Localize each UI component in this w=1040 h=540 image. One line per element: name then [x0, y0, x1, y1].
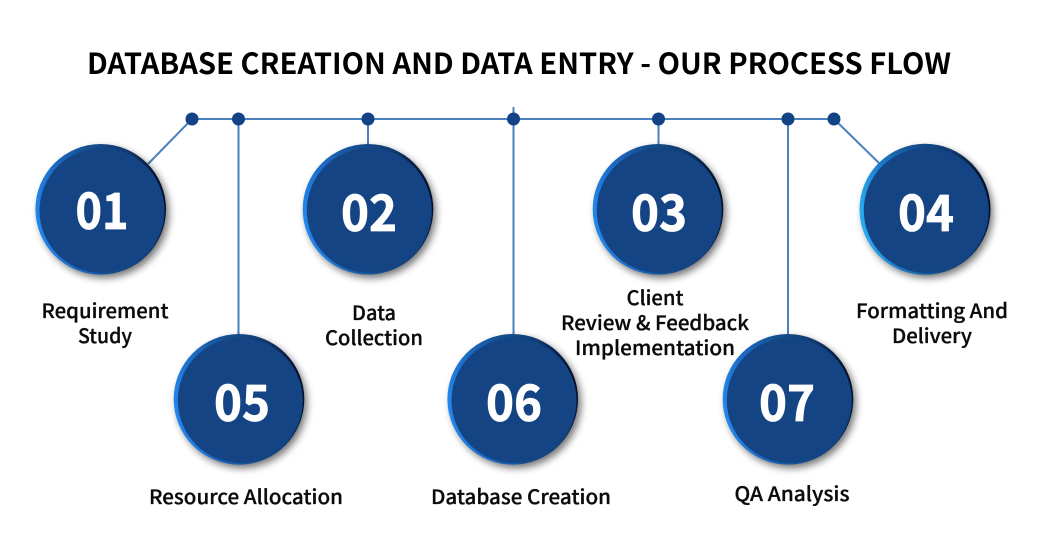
step 06 badge [447, 334, 581, 468]
step 05 badge [174, 334, 307, 468]
step 07 badge: 07 [759, 364, 815, 436]
label: client review and feedback implementation: Review & Feedback [561, 307, 750, 336]
label: database creation: Database Creation [431, 481, 611, 510]
label: client review and feedback implementation [561, 282, 750, 361]
label: resource allocation: Resource Allocation [149, 481, 343, 510]
label: formatting and delivery: Formatting And [856, 295, 1008, 324]
step 03 badge [593, 144, 726, 278]
label: qa analysis: QA Analysis [734, 478, 850, 507]
timeline nodes [186, 112, 840, 126]
step 05 badge: 05 [214, 364, 270, 436]
step 01 badge: 01 [76, 172, 128, 244]
label: requirement study: Study [78, 320, 132, 349]
step 02 badge: 02 [341, 174, 397, 246]
step 07 badge [723, 334, 856, 468]
title: DATABASE CREATION AND DATA ENTRY - OUR PROCESS FLOW [87, 41, 951, 83]
label: formatting and delivery [856, 295, 1008, 349]
label: data collection: Collection [325, 322, 423, 351]
step 04 badge: 04 [898, 174, 954, 246]
step 02 badge [303, 144, 436, 278]
step 01 badge [35, 144, 169, 278]
label: requirement study [42, 295, 169, 349]
label: data collection [325, 297, 423, 351]
label: formatting and delivery: Delivery [892, 320, 972, 349]
label: client review and feedback implementation: Implementation [575, 332, 735, 361]
step 06 badge: 06 [486, 364, 542, 436]
process timeline connector [148, 107, 880, 336]
label: data collection: Data [352, 297, 396, 326]
label: client review and feedback implementation: Client [626, 282, 684, 311]
label: requirement study: Requirement [42, 295, 169, 324]
step 03 badge: 03 [631, 174, 687, 246]
step 04 badge [860, 144, 993, 278]
